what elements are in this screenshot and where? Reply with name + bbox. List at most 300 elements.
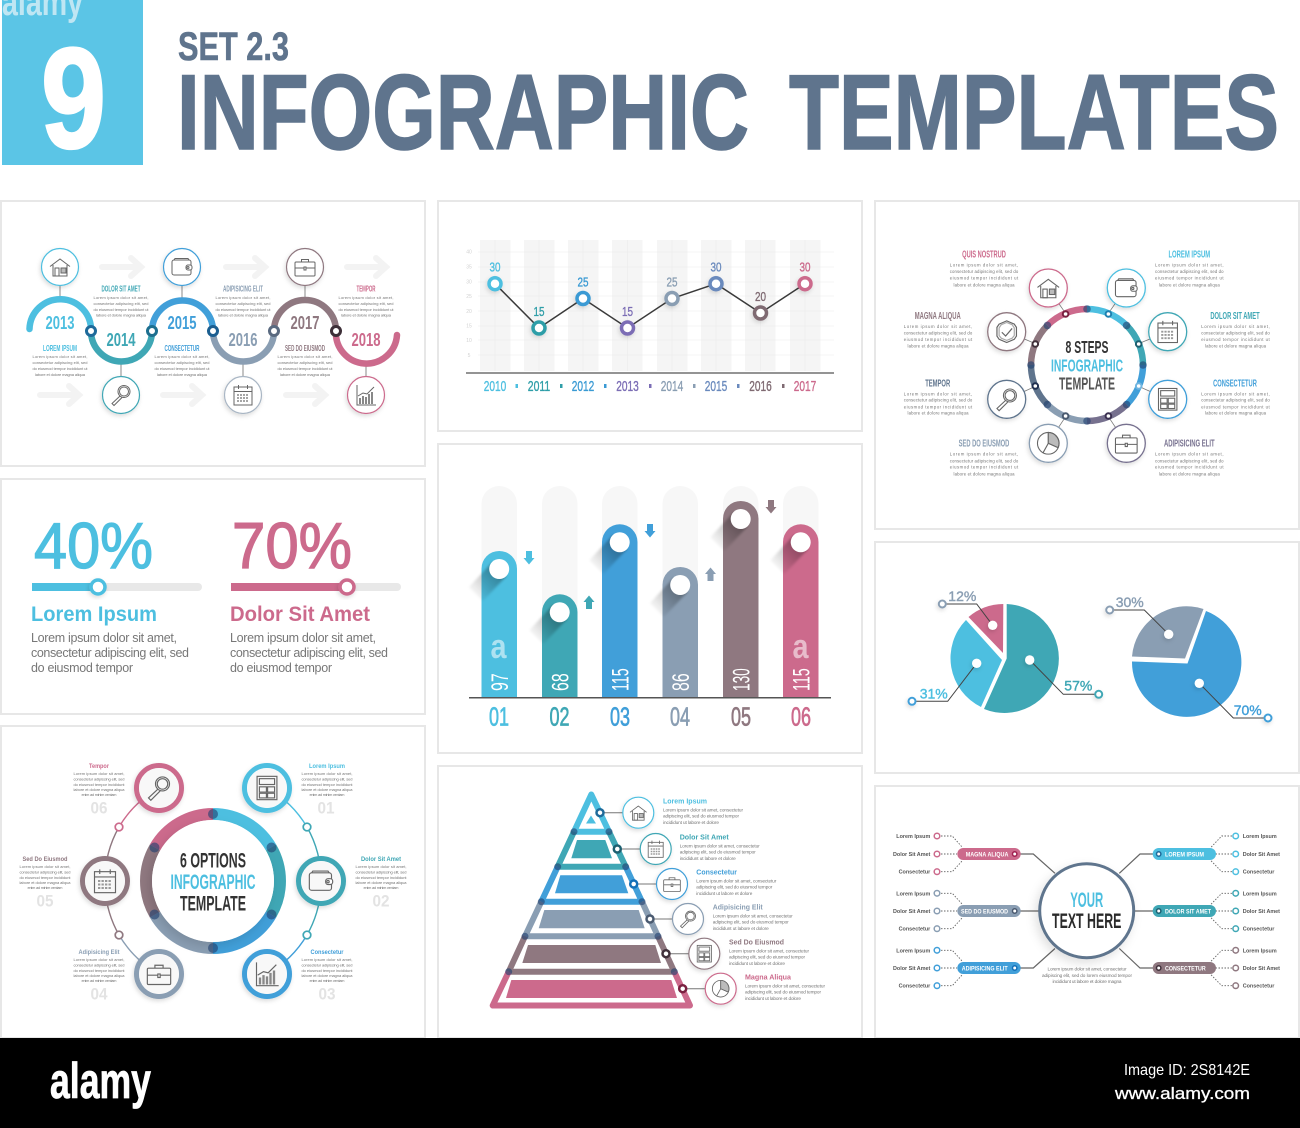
bar 01 — [469, 551, 517, 697]
level 4 icon and text: Lorem ipsum dolor sit amet, consectetur — [713, 914, 793, 918]
stat: 40 percent: Lorem Ipsum — [31, 603, 157, 626]
year labels: 2014 — [661, 378, 683, 395]
footer logo: alamy — [50, 1053, 151, 1109]
step text: Tempor: TEMPOR — [925, 377, 950, 389]
text: Adipisicing Elit: labore et dolore magna aliqua — [218, 312, 269, 318]
right branch: Dolor Sit Amet: Dolor Sit Amet — [1243, 909, 1280, 915]
text: Adipisicing Elit: ADIPISICING ELIT — [223, 284, 263, 294]
icon: house 2013 — [42, 248, 78, 286]
text: Dolor Sit Amet: Lorem ipsum dolor sit amet, — [94, 295, 148, 300]
center circle: TEXT HERE — [1052, 910, 1121, 933]
step text: Consectetur: consectetur adipiscing elit, sed do — [1201, 398, 1270, 403]
text: Adipisicing Elit — [216, 284, 271, 318]
option 03 text: Consectetur — [310, 949, 344, 956]
step text: Consectetur: eiusmod tempor incididunt ut — [1201, 404, 1271, 409]
step text: Lorem Ipsum: LOREM IPSUM — [1168, 248, 1210, 260]
stat: 70 percent — [230, 509, 401, 675]
bar 04: 86 — [668, 673, 695, 691]
left branch: Magna Aliqua: Dolor Sit Amet — [893, 852, 930, 858]
right branch: Consectetur: Consectetur — [1243, 984, 1275, 990]
step icon: briefcase — [1107, 424, 1145, 462]
right branch: Consectetur: CONSECTETUR — [1165, 965, 1206, 972]
step text: Consectetur: Lorem ipsum dolor sit amet, — [1201, 391, 1270, 396]
panel: timeline 2013-2018 — [1, 201, 425, 466]
bar 01: 97 — [487, 673, 514, 691]
center caption: Lorem ipsum dolor sit amet, consectetur — [1048, 967, 1127, 972]
level 6 icon and text: adipiscing elit, sed do eiusmod tempor — [745, 990, 821, 995]
right branch: Lorem Ipsum: Dolor Sit Amet — [1243, 852, 1280, 858]
level 5 icon and text: Lorem ipsum dolor sit amet, consectetur — [729, 948, 809, 954]
option 02 text: enim ad minim veniam — [364, 885, 399, 890]
pyramid levels — [506, 816, 677, 998]
text: Dolor Sit Amet: consectetur adipiscing elit, sed — [94, 301, 148, 306]
wave line — [30, 299, 397, 364]
option 02 text: 02 — [372, 892, 390, 910]
wave nodes — [86, 326, 340, 336]
left branch: Adipisicing Elit — [893, 948, 1021, 990]
step text: Tempor — [904, 377, 973, 416]
text: Consectetur — [154, 343, 210, 377]
bar 06: 115 — [788, 668, 816, 691]
step text: Magna Aliqua: consectetur adipiscing elit, sed do — [904, 330, 973, 336]
pie chart 1: 57% — [1064, 678, 1092, 694]
center caption: incididunt ut labore et dolore magna — [1052, 979, 1122, 984]
ring segments — [146, 814, 280, 948]
data values: 30 — [710, 260, 722, 274]
step text: Sed Do Eiusmod: labore et dolore magna aliqua — [954, 471, 1015, 476]
level 2 icon and text: incididunt ut labore et dolore — [680, 856, 736, 861]
text: Lorem Ipsum: Lorem ipsum dolor sit amet, — [32, 354, 88, 359]
bar labels: 06 — [791, 702, 811, 732]
text: Tempor: consectetur adipiscing elit, sed — [338, 301, 394, 306]
text: Consectetur: consectetur adipiscing elit, sed — [154, 360, 210, 365]
level 2 icon and text: Dolor Sit Amet — [680, 833, 729, 842]
left branch: Magna Aliqua: MAGNA ALIQUA — [966, 851, 1009, 858]
option 01 text — [302, 763, 353, 818]
step text: Consectetur: CONSECTETUR — [1213, 377, 1257, 389]
panel: pie charts — [875, 542, 1299, 773]
level 2 icon and text: Lorem ipsum dolor sit amet, consectetur — [680, 844, 760, 848]
left branch: Sed Do Eiusmod: SED DO EIUSMOD — [961, 908, 1008, 915]
center title: TEMPLATE — [180, 892, 246, 916]
level 3 icon and text — [656, 868, 777, 900]
option 05 text: enim ad minim veniam — [28, 885, 63, 890]
data values: 25 — [578, 274, 588, 290]
step text: Tempor: eiusmod tempor incididunt ut — [904, 404, 973, 409]
level 3 icon and text: adipiscing elit, sed do eiusmod tempor — [696, 885, 773, 890]
level 6 icon and text: incididunt ut labore et dolore — [745, 996, 801, 1001]
text: Adipisicing Elit: consectetur adipiscing elit, sed — [216, 301, 270, 306]
y axis labels: 35 — [466, 264, 472, 270]
orbit nodes — [115, 823, 311, 939]
bar 01: a — [490, 628, 507, 666]
pie chart 1 — [908, 588, 1102, 713]
text: Dolor Sit Amet: DOLOR SIT AMET — [102, 284, 141, 294]
level 1 icon and text: incididunt ut labore et dolore — [663, 820, 719, 825]
bar labels: 05 — [731, 702, 751, 732]
text: Tempor: TEMPOR — [356, 284, 376, 294]
option 05 text: Sed Do Eiusmod — [22, 856, 68, 863]
bar labels: 02 — [550, 702, 570, 732]
years: 2015 — [168, 313, 196, 333]
left branch: Adipisicing Elit: ADIPISICING ELIT — [962, 965, 1008, 972]
y axis labels — [466, 250, 472, 359]
option 01 text: do eiusmod tempor incididunt — [302, 782, 353, 787]
step text: Adipisicing Elit: eiusmod tempor incididunt ut — [1155, 465, 1224, 470]
text: Consectetur: labore et dolore magna aliqua — [157, 372, 208, 377]
level 1 icon and text: adipiscing elit, sed do eiusmod tempor — [663, 814, 739, 819]
level 5 icon and text: adipiscing elit, sed do eiusmod tempor — [729, 955, 805, 960]
years: 2016 — [228, 330, 258, 350]
y axis labels: 25 — [466, 294, 472, 300]
bar labels — [489, 702, 811, 732]
y axis labels: 30 — [466, 280, 472, 286]
option 03 text: do eiusmod tempor incididunt — [302, 968, 353, 973]
left branch: Sed Do Eiusmod: Consectetur — [899, 927, 931, 933]
text: Tempor: Lorem ipsum dolor sit amet, — [338, 295, 394, 300]
x axis — [466, 372, 834, 374]
text: Sed Do Eiusmod: consectetur adipiscing elit, sed — [278, 360, 332, 365]
center title — [1051, 337, 1123, 394]
right branch: Lorem Ipsum: Consectetur — [1243, 870, 1275, 876]
y axis labels: 15 — [466, 324, 472, 330]
right branch: Consectetur: Dolor Sit Amet — [1243, 966, 1280, 972]
text: Sed Do Eiusmod: do eiusmod tempor incididunt ut — [278, 366, 333, 371]
footer bar — [0, 1038, 1300, 1128]
option 04 text: 04 — [90, 984, 108, 1004]
step text: Lorem Ipsum: consectetur adipiscing elit, sed do — [1155, 269, 1224, 274]
ring connectors — [1007, 288, 1168, 443]
option 06 text: 06 — [90, 798, 108, 818]
option 05 text: 05 — [36, 892, 54, 910]
step text: Sed Do Eiusmod: eiusmod tempor incididunt ut — [950, 465, 1019, 470]
icon: chart 2018 — [348, 376, 384, 414]
bar labels: 04 — [670, 702, 690, 732]
baseline — [469, 697, 831, 698]
step icon: shield — [988, 313, 1026, 351]
option 01 text: consectetur adipiscing elit, sed — [302, 776, 352, 782]
chart columns — [480, 240, 820, 371]
left branch: Adipisicing Elit: Lorem Ipsum — [896, 948, 930, 954]
option 06 text: labore et dolore magna aliqua — [74, 787, 125, 792]
level 3 icon and text: Consectetur — [696, 868, 737, 877]
center title: 6 OPTIONS — [180, 850, 246, 872]
option 04 text: consectetur adipiscing elit, sed — [74, 962, 124, 968]
step text: Sed Do Eiusmod — [950, 438, 1019, 476]
data values: 15 — [534, 304, 544, 319]
connector lines — [60, 285, 366, 377]
right branch: Dolor Sit Amet: Lorem Ipsum — [1243, 891, 1277, 897]
stat: 40 percent: do eiusmod tempor — [31, 661, 133, 675]
step icon: calculator — [1149, 380, 1187, 418]
level 6 icon and text: Lorem ipsum dolor sit amet, consectetur — [745, 984, 825, 988]
option 05 text: labore et dolore magna aliqua — [20, 880, 71, 885]
center caption: adipiscing elit, sed do lorem eiusmod tempor — [1042, 973, 1132, 978]
option 04 text: labore et dolore magna aliqua — [74, 973, 125, 978]
step icon: calendar — [1149, 313, 1187, 351]
data values: 30 — [490, 260, 500, 274]
level 5 icon and text — [689, 938, 809, 969]
option 02 text — [356, 856, 407, 910]
step text: Tempor: Lorem ipsum dolor sit amet, — [904, 391, 972, 396]
bar 06 — [770, 524, 818, 697]
right branch: Dolor Sit Amet — [1153, 890, 1280, 933]
icon: calendar 2016 — [224, 376, 262, 414]
option 02 icon — [298, 858, 344, 904]
text: Lorem Ipsum: LOREM IPSUM — [43, 343, 77, 353]
option 05 text: Lorem ipsum dolor sit amet, — [20, 864, 70, 869]
step text: Sed Do Eiusmod: Lorem ipsum dolor sit amet, — [950, 452, 1018, 457]
step text: Magna Aliqua: Lorem ipsum dolor sit amet, — [904, 324, 972, 329]
bar 05 — [710, 501, 758, 697]
stat: 70 percent: Dolor Sit Amet — [230, 603, 370, 626]
stat: 70 percent: consectetur adipiscing elit, sed — [230, 646, 388, 660]
bar tracks — [482, 486, 818, 697]
step icon: magnifier — [988, 380, 1026, 418]
step text: Dolor Sit Amet: eiusmod tempor incididunt ut — [1201, 337, 1271, 342]
icon: magnifier 2014 — [102, 376, 140, 414]
year labels: 2015 — [705, 378, 727, 395]
text: Tempor: do eiusmod tempor incididunt ut — [338, 307, 394, 312]
pie chart 2 — [1106, 594, 1272, 722]
step text: Adipisicing Elit — [1155, 438, 1224, 476]
level 2 icon and text: adipiscing elit, sed do eiusmod tempor — [680, 850, 756, 855]
option 06 icon — [136, 766, 182, 810]
bar labels: 03 — [610, 702, 630, 732]
option 06 text: do eiusmod tempor incididunt — [74, 782, 125, 787]
bar 05: 130 — [728, 668, 756, 691]
option 01 text: enim ad minim veniam — [310, 792, 345, 797]
panel: percent sliders — [1, 479, 425, 714]
center title: TEMPLATE — [1059, 374, 1115, 394]
left branch: Magna Aliqua: Consectetur — [899, 870, 931, 876]
data values — [490, 260, 810, 319]
years: 2018 — [352, 330, 380, 350]
panel: 8 steps ring — [875, 201, 1299, 529]
footer url: www.alamy.com — [1114, 1084, 1250, 1103]
data values: 30 — [800, 260, 810, 274]
data values: 20 — [755, 289, 766, 304]
step text: Quis Nostrud: consectetur adipiscing elit, sed do — [950, 269, 1019, 274]
data values: 15 — [622, 304, 633, 319]
text: Sed Do Eiusmod: Lorem ipsum dolor sit amet, — [278, 354, 332, 359]
text: Lorem Ipsum: labore et dolore magna aliqua — [35, 372, 86, 377]
right branch: Lorem Ipsum: LOREM IPSUM — [1165, 851, 1204, 858]
y axis labels: 20 — [466, 309, 472, 315]
option 02 text: do eiusmod tempor incididunt — [356, 875, 407, 880]
option 01 text: Lorem Ipsum — [309, 763, 345, 770]
left branch: Adipisicing Elit: Dolor Sit Amet — [893, 966, 930, 972]
center caption — [1042, 967, 1132, 984]
ring joints — [1027, 305, 1147, 425]
bar 06: a — [792, 628, 809, 666]
arrows: timeline background arrows — [40, 258, 386, 404]
header: title — [177, 25, 1279, 172]
option 02 text: consectetur adipiscing elit, sed — [356, 870, 406, 874]
year labels: 2016 — [749, 378, 772, 395]
step text: Dolor Sit Amet: labore et dolore magna aliqua — [1205, 344, 1267, 349]
text: Lorem Ipsum — [32, 343, 88, 377]
level 1 icon and text: Lorem ipsum dolor sit amet, consectetur — [663, 808, 743, 812]
left branch: Sed Do Eiusmod: Dolor Sit Amet — [893, 909, 930, 915]
bar 02 — [530, 594, 578, 697]
text: Adipisicing Elit: Lorem ipsum dolor sit amet, — [216, 295, 270, 300]
level 4 icon and text: Adipisicing Elit — [713, 903, 763, 912]
text: Lorem Ipsum: do eiusmod tempor incididunt ut — [32, 366, 88, 371]
option 04 text: do eiusmod tempor incididunt — [74, 968, 125, 973]
text: Dolor Sit Amet: labore et dolore magna aliqua — [96, 312, 147, 318]
step text: Adipisicing Elit: Lorem ipsum dolor sit amet, — [1155, 452, 1224, 457]
step text: Lorem Ipsum: labore et dolore magna aliqua — [1159, 282, 1220, 288]
panel: mind map — [875, 786, 1299, 1038]
dotted lines — [941, 836, 1232, 986]
step text: Consectetur: labore et dolore magna aliqua — [1205, 411, 1267, 416]
stat: 40 percent: Lorem ipsum dolor sit amet, — [31, 631, 177, 645]
y axis labels: 5 — [468, 353, 471, 359]
step text: Sed Do Eiusmod: consectetur adipiscing elit, sed do — [950, 458, 1019, 463]
pyramid joints — [505, 828, 678, 975]
level 4 icon and text: adipiscing elit, sed do eiusmod tempor — [713, 920, 789, 925]
level 5 icon and text: Sed Do Eiusmod — [729, 938, 784, 947]
right branch: Lorem Ipsum: Lorem Ipsum — [1243, 834, 1277, 840]
header: number badge: 9 — [41, 20, 106, 178]
year labels: 2011 — [528, 378, 550, 395]
panel: pyramid — [438, 766, 862, 1038]
step text: Dolor Sit Amet: Lorem ipsum dolor sit amet, — [1201, 324, 1270, 329]
text: Consectetur: do eiusmod tempor incididunt ut — [154, 366, 210, 371]
text: Dolor Sit Amet: do eiusmod tempor incididunt ut — [94, 307, 149, 312]
pyramid frame — [493, 794, 690, 1006]
ring nodes — [1032, 311, 1141, 419]
option 02 text: labore et dolore magna aliqua — [356, 880, 407, 885]
step text: Magna Aliqua: eiusmod tempor incididunt ut — [904, 337, 973, 342]
level 3 icon and text: Lorem ipsum dolor sit amet, consectetur — [696, 878, 777, 884]
level 1 icon and text: Lorem Ipsum — [663, 797, 707, 806]
data points — [489, 278, 811, 334]
option 01 text: 01 — [318, 798, 334, 818]
step icon: house — [1029, 269, 1067, 307]
stat: 70 percent: Lorem ipsum dolor sit amet, — [230, 631, 376, 645]
panel: bar chart — [438, 444, 862, 753]
option 04 icon — [136, 952, 182, 996]
stat: 70 percent: do eiusmod tempor — [230, 661, 332, 675]
text: Sed Do Eiusmod — [278, 343, 333, 377]
trend arrows — [524, 500, 776, 609]
step text: Magna Aliqua: labore et dolore magna aliqua — [908, 344, 969, 349]
pyramid connectors — [600, 813, 705, 989]
step text: Quis Nostrud: labore et dolore magna aliqua — [954, 282, 1015, 288]
option 02 text: Dolor Sit Amet — [361, 856, 402, 863]
stat: 70 percent: 70% — [232, 509, 352, 582]
option 03 text: labore et dolore magna aliqua — [302, 973, 353, 978]
header: number badge — [2, 0, 143, 178]
step text: Lorem Ipsum: eiusmod tempor incididunt ut — [1155, 276, 1224, 280]
level 6 icon and text — [705, 973, 825, 1004]
center title: INFOGRAPHIC — [170, 871, 256, 894]
right branch: Lorem Ipsum — [1153, 833, 1280, 876]
step text: Adipisicing Elit: ADIPISICING ELIT — [1164, 438, 1215, 450]
y axis labels: 40 — [466, 250, 472, 256]
right branch: Dolor Sit Amet: Consectetur — [1243, 927, 1275, 933]
years: 2013 — [46, 313, 74, 333]
center title: 8 STEPS — [1066, 337, 1108, 357]
pie chart 1: 31% — [920, 685, 948, 701]
option 05 text — [20, 856, 71, 910]
pyramid nodes — [596, 809, 686, 992]
header: title: SET 2.3 — [178, 25, 289, 69]
bar 04 — [650, 567, 698, 697]
stat: 40 percent: 40% — [34, 509, 153, 582]
step text: Magna Aliqua: MAGNA ALIQUA — [915, 310, 961, 322]
level 4 icon and text: incididunt ut labore et dolore — [713, 926, 769, 931]
left branch: Sed Do Eiusmod — [893, 890, 1021, 933]
step text: Adipisicing Elit: consectetur adipiscing elit, sed do — [1155, 458, 1224, 463]
option 05 text: consectetur adipiscing elit, sed — [20, 870, 70, 874]
option 03 text: 03 — [318, 984, 336, 1004]
step text: Quis Nostrud: QUIS NOSTRUD — [962, 248, 1006, 260]
y axis labels: 10 — [466, 338, 472, 344]
branch lines — [1020, 854, 1153, 968]
level 2 icon and text — [640, 833, 760, 864]
right branch: Dolor Sit Amet: DOLOR SIT AMET — [1165, 908, 1211, 915]
level 4 icon and text — [672, 903, 793, 934]
option 01 text: labore et dolore magna aliqua — [302, 787, 353, 792]
header: title: INFOGRAPHIC — [177, 52, 749, 172]
option 03 icon — [244, 952, 290, 996]
level 3 icon and text: incididunt ut labore et dolore — [696, 891, 753, 896]
year labels: 2010 — [484, 378, 506, 395]
right branch: Consectetur — [1153, 948, 1280, 990]
text: Consectetur: Lorem ipsum dolor sit amet, — [154, 354, 210, 359]
center circle — [1040, 864, 1134, 958]
option 06 text — [74, 763, 125, 818]
text: Dolor Sit Amet — [94, 284, 149, 318]
left branch: Magna Aliqua: Lorem Ipsum — [896, 834, 930, 840]
text: Tempor — [338, 284, 394, 318]
option 01 text: Lorem ipsum dolor sit amet, — [302, 771, 352, 776]
icon: briefcase 2017 — [286, 248, 324, 286]
left branch: Sed Do Eiusmod: Lorem Ipsum — [896, 891, 930, 897]
step icon: wallet — [1107, 269, 1145, 307]
footer image id: Image ID: 2S8142E — [1124, 1062, 1250, 1079]
data line — [495, 284, 805, 328]
ring segments — [1031, 309, 1143, 421]
orbit lines — [105, 788, 321, 974]
step text: Magna Aliqua — [904, 310, 973, 349]
step text: Sed Do Eiusmod: SED DO EIUSMOD — [959, 438, 1010, 450]
year labels — [484, 378, 816, 395]
step text: Adipisicing Elit: labore et dolore magna aliqua — [1159, 471, 1220, 476]
step text: Quis Nostrud: Lorem ipsum dolor sit amet, — [950, 263, 1018, 268]
option 06 text: enim ad minim veniam — [82, 792, 117, 797]
stat: 40 percent: consectetur adipiscing elit, sed — [31, 646, 189, 660]
step text: Tempor: labore et dolore magna aliqua — [908, 411, 969, 416]
year labels: 2012 — [572, 378, 594, 395]
text: Lorem Ipsum: consectetur adipiscing elit, sed — [32, 360, 88, 365]
center title: INFOGRAPHIC — [1051, 356, 1123, 376]
left branch: Magna Aliqua — [893, 833, 1021, 876]
data values: 25 — [666, 274, 678, 290]
year labels: 2013 — [616, 378, 639, 395]
pie chart 1: 12% — [948, 588, 976, 604]
step text: Dolor Sit Amet — [1201, 310, 1271, 349]
option 04 text — [74, 949, 125, 1004]
option 03 text: enim ad minim veniam — [310, 978, 345, 983]
option 06 text: Lorem ipsum dolor sit amet, — [74, 771, 124, 776]
text: Sed Do Eiusmod: SED DO EIUSMOD — [285, 343, 325, 353]
step text: Consectetur — [1201, 377, 1271, 416]
option 05 icon — [82, 858, 128, 904]
